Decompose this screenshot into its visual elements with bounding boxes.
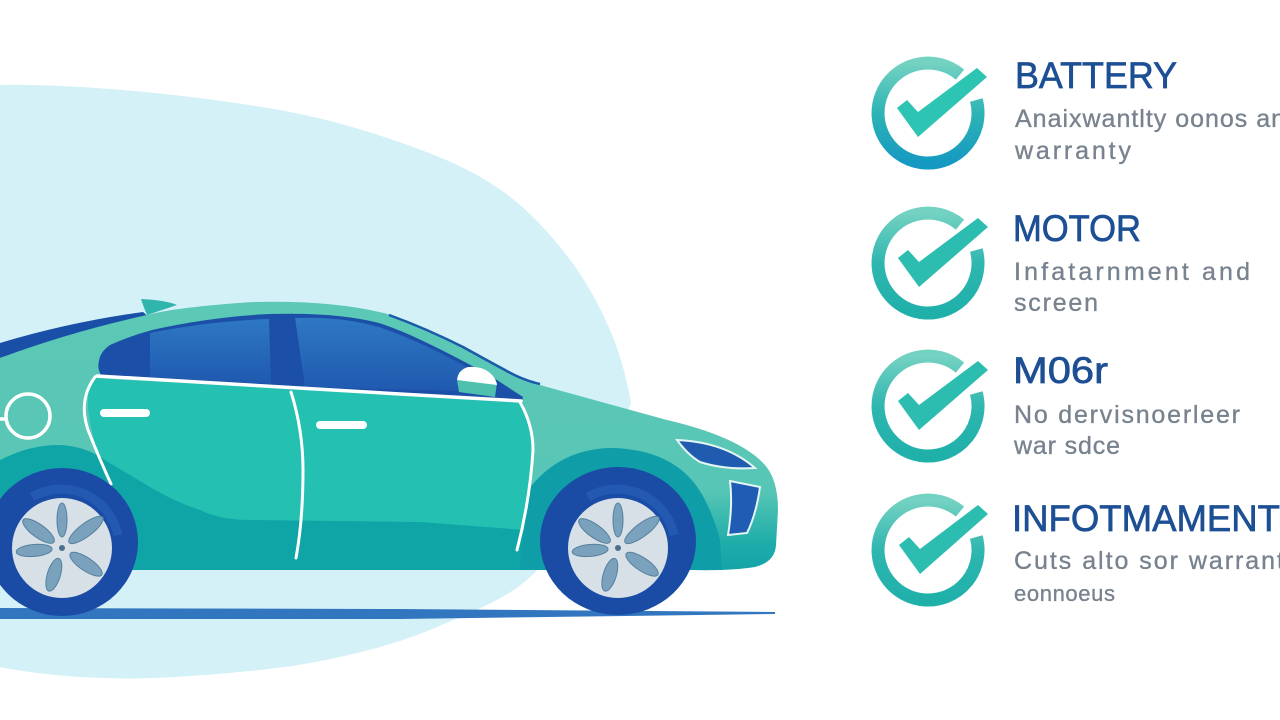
lower body band <box>0 445 525 570</box>
front wheel arch <box>520 448 722 570</box>
item: motor <box>878 208 1250 317</box>
door handles <box>104 413 363 425</box>
rear roof band <box>0 312 150 358</box>
windows <box>98 314 523 401</box>
description: Anaixwantlty oonos an <box>1015 105 1280 133</box>
heading: INFOTMAMENT <box>1012 498 1280 539</box>
background blob <box>0 85 631 678</box>
heading: BATTERY <box>1015 55 1177 96</box>
fuel port <box>0 394 50 438</box>
headlight <box>677 440 755 468</box>
heading: MOTOR <box>1013 208 1141 249</box>
windshield edge <box>389 315 540 384</box>
check icon <box>878 356 988 456</box>
front wheel <box>540 467 696 615</box>
mirror <box>457 367 497 397</box>
description: No dervisnoerleer <box>1014 401 1240 429</box>
car body <box>0 302 778 570</box>
check icon <box>878 63 987 163</box>
front intake <box>728 481 760 535</box>
ground shadow <box>0 608 775 619</box>
door seams <box>84 376 533 558</box>
item: battery <box>878 55 1280 165</box>
car <box>0 299 778 616</box>
spoiler fin <box>141 299 177 315</box>
item: moor: war sdce <box>1013 432 1120 460</box>
heading: M06r <box>1013 350 1108 391</box>
door panel <box>88 378 533 565</box>
rear wheel <box>0 468 138 616</box>
window panes <box>150 318 495 392</box>
check icon <box>878 213 988 313</box>
description: Cuts alto sor warrant <box>1014 547 1280 575</box>
item: moor <box>878 350 1240 460</box>
item: infotainment: eonnoeus <box>1014 581 1115 606</box>
description: Infatarnment and <box>1014 258 1250 286</box>
item: motor: screen <box>1014 289 1098 317</box>
item: infotainment <box>878 498 1280 606</box>
check icon <box>878 500 988 600</box>
item: battery: warranty <box>1014 137 1132 165</box>
